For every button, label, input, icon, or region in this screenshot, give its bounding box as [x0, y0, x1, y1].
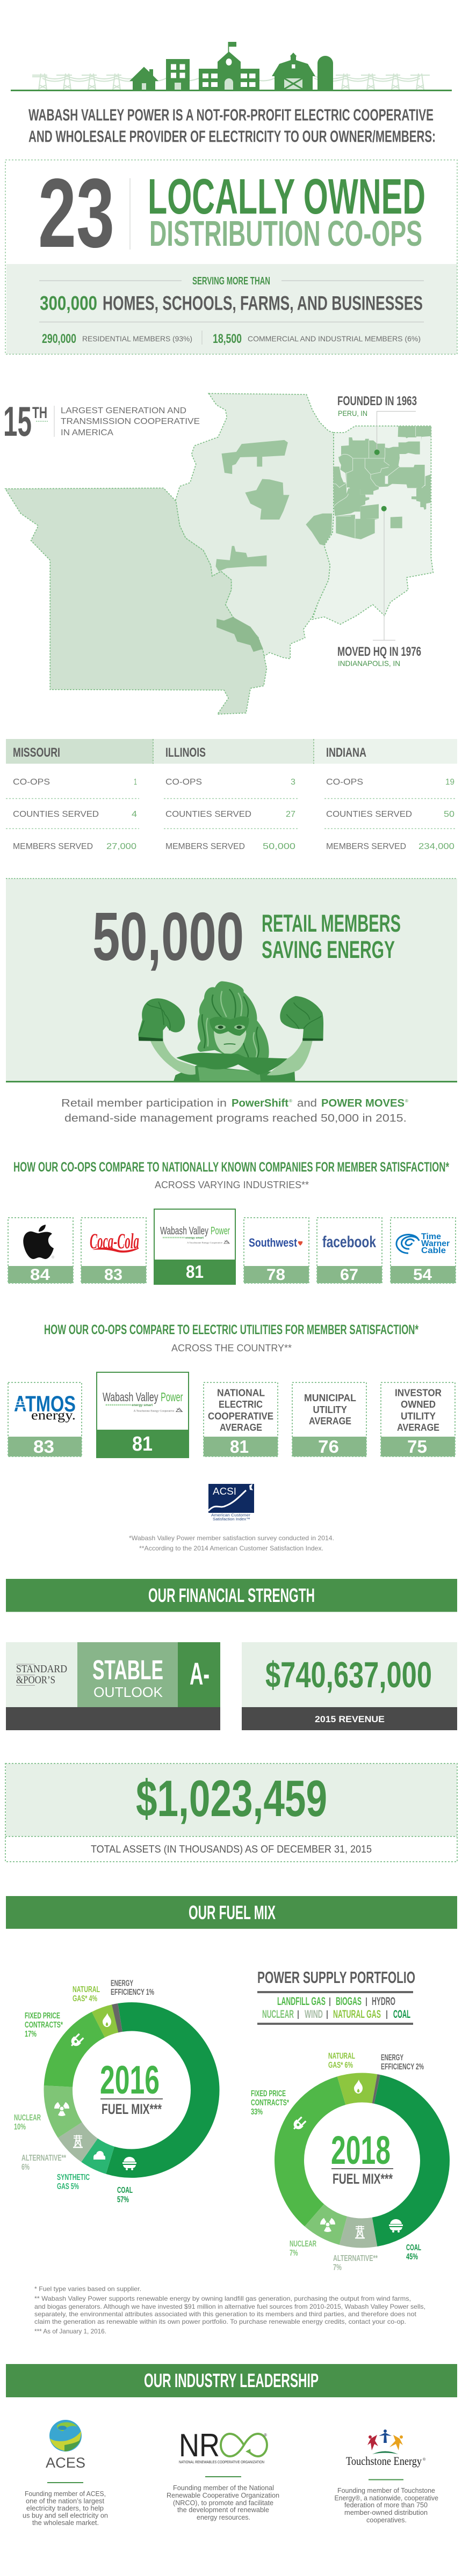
map: Missouri, Illinois, Indiana service territories — [3, 393, 433, 714]
center label 2018: 2018 — [331, 2128, 391, 2172]
column: Illinois: 27 — [286, 810, 295, 819]
logo: ACES — [46, 2420, 85, 2471]
footnotes: fuel mix: *** As of January 1, 2016. — [34, 2328, 106, 2335]
section header: fuel mix: OUR FUEL MIX — [189, 1901, 276, 1923]
column: Missouri: MEMBERS SERVED — [13, 842, 93, 851]
text: retail member participation: Retail member participation in — [61, 1097, 227, 1109]
text: Touchstone description: cooperatives. — [366, 2516, 407, 2524]
card: Wabash Valley Power 81: 81 — [132, 1433, 153, 1455]
card: Atmos Energy 83: 83 — [33, 1437, 54, 1457]
column: Illinois: 50,000 — [263, 842, 295, 851]
heading: electric utilities — [44, 1322, 418, 1353]
serving more than: SERVING MORE THAN — [192, 275, 270, 287]
icon: flame — [103, 2013, 111, 2027]
logo: NRCO — [179, 2427, 267, 2464]
text: ACES description: us buy and sell electricity on — [23, 2512, 108, 2519]
logo: NRCO: ® — [264, 2433, 267, 2438]
intro heading — [28, 105, 436, 146]
stat: 15th largest: IN AMERICA — [61, 428, 113, 437]
labels 2016: ALTERNATIVE** — [21, 2154, 67, 2163]
labels 2016: CONTRACTS* — [25, 2021, 63, 2030]
photo: child superhero with boxing gloves — [138, 981, 323, 1081]
card: Apple 84 — [8, 1218, 73, 1284]
icon: coal cart — [122, 2157, 136, 2170]
card: Facebook 67: 67 — [340, 1266, 358, 1284]
labels 2018: NATURAL — [328, 2052, 355, 2061]
leadership: Touchstone Energy — [334, 2429, 438, 2524]
labels 2016: ENERGY — [111, 1979, 133, 1988]
logo: ACES: ACES — [46, 2455, 85, 2471]
section header: industry leadership: OUR INDUSTRY LEADERSHIP — [144, 2369, 319, 2391]
column: Missouri: 4 — [132, 810, 137, 819]
leadership: NRCO — [167, 2427, 279, 2521]
stat: 15th largest: 15 — [3, 398, 32, 445]
card: municipal utility average 76: 76 — [318, 1437, 339, 1457]
text: Touchstone description: Energy®, a nationwide, cooperative — [334, 2494, 438, 2502]
power supply portfolio: LANDFILL GAS — [277, 1995, 326, 2008]
card: Time Warner Cable 54: Time — [421, 1232, 441, 1241]
logo: ACSI: American Customer — [211, 1512, 251, 1518]
number 50,000: 50,000 — [92, 898, 244, 975]
power supply portfolio: COAL — [393, 2008, 410, 2021]
serving more than — [39, 275, 424, 322]
icon: pylon — [355, 2226, 365, 2238]
text: Touchstone description: Founding member of Touchstone — [337, 2487, 435, 2494]
card: Time Warner Cable 54: Cable — [421, 1246, 446, 1255]
card: Atmos Energy 83: ATMOS — [14, 1391, 76, 1416]
illustration: town skyline with power lines — [11, 42, 452, 91]
labels 2018: 33% — [251, 2107, 263, 2117]
card: investor owned utility average 75: INVESTOR — [395, 1388, 442, 1399]
footnotes: fuel mix: separately, the environmental attributes associated with this generation to its members and third parties, and therefore does not — [34, 2310, 417, 2318]
icon: cloud — [93, 2151, 105, 2160]
callout: moved HQ in 1976: INDIANAPOLIS, IN — [338, 659, 400, 668]
heading: electric utilities: ACROSS THE COUNTRY** — [171, 1343, 292, 1353]
column: Missouri: COUNTIES SERVED — [13, 810, 99, 819]
card: Facebook 67 — [317, 1218, 382, 1284]
labels 2016: NATURAL — [73, 1985, 100, 1994]
panel: 2015 revenue: 2015 REVENUE — [315, 1714, 385, 1724]
logo: Standard & Poor's — [16, 1663, 67, 1686]
power supply portfolio: NUCLEAR — [262, 2008, 294, 2021]
stat: 15th largest — [3, 398, 200, 445]
labels 2018: ENERGY — [381, 2053, 403, 2062]
office building — [166, 59, 190, 90]
footnotes: fuel mix: and biogas generators. Although we have invested $91 million in alternative fuel sources from 2010-2015, Wabash Valley Power sells, — [34, 2303, 425, 2310]
Illinois — [175, 393, 334, 659]
column: Indiana: MEMBERS SERVED — [326, 842, 406, 851]
card: Wabash Valley Power 81 — [154, 1209, 236, 1285]
labels 2018: ALTERNATIVE** — [333, 2254, 378, 2263]
card: Time Warner Cable 54: Warner — [421, 1239, 450, 1248]
panel: 23 locally owned co-ops — [5, 158, 457, 354]
service areas: north Indiana — [333, 426, 431, 519]
column: Indiana: INDIANA — [326, 745, 366, 760]
section header: financial strength: OUR FINANCIAL STRENGTH — [148, 1584, 315, 1606]
column: Indiana: COUNTIES SERVED — [326, 810, 412, 819]
card: Wabash Valley Power 81 — [96, 1372, 189, 1458]
labels 2016: NUCLEAR — [14, 2113, 41, 2123]
card: investor owned utility average 75: 75 — [407, 1437, 427, 1457]
card: municipal utility average 76: UTILITY — [313, 1404, 347, 1415]
stable outlook: STABLE — [92, 1655, 163, 1685]
stable outlook: OUTLOOK — [93, 1684, 163, 1700]
column: Indiana: 234,000 — [418, 842, 454, 851]
stat: 15th largest: LARGEST GENERATION AND — [61, 406, 186, 415]
text: NRCO description: Renewable Cooperative Organization — [167, 2492, 279, 2499]
card: investor owned utility average 75: UTILITY — [401, 1411, 436, 1422]
card: municipal utility average 76 — [292, 1382, 366, 1457]
card: Coca-Cola 83 — [81, 1218, 146, 1284]
column: Illinois: COUNTIES SERVED — [165, 810, 251, 819]
300,000 homes line: 300,000 — [40, 292, 97, 314]
card: national electric cooperative average 81: 81 — [230, 1437, 249, 1457]
column: Illinois — [153, 739, 314, 851]
logo: Touchstone Energy — [346, 2429, 426, 2468]
text: ACES description: Founding member of ACES, — [25, 2490, 106, 2498]
text: NRCO description — [167, 2484, 279, 2521]
text: NRCO description: (NRCO), to promote and facilitate — [173, 2499, 273, 2507]
section header: fuel mix — [6, 1896, 457, 1929]
text: retail member participation: ® — [405, 1099, 408, 1103]
text: retail member participation — [61, 1097, 408, 1124]
silo — [317, 56, 333, 90]
labels 2016: 57% — [117, 2195, 129, 2205]
card: Coca-Cola 83: 83 — [104, 1266, 122, 1284]
center label 2018: FUEL MIX*** — [333, 2171, 393, 2187]
footnotes: fuel mix: ** Wabash Valley Power supports renewable energy by owning landfill gas generation, purchasing the output from wind farms, — [34, 2295, 411, 2302]
Missouri — [5, 488, 266, 714]
panel: total assets: $1,023,459 — [136, 1770, 327, 1827]
panel: 2015 revenue — [242, 1642, 457, 1730]
text: retail member participation: PowerShift — [232, 1097, 288, 1109]
residential members — [42, 332, 192, 346]
column: Indiana: 50 — [444, 810, 454, 819]
card: Southwest 78: Southwest — [249, 1236, 298, 1249]
card: investor owned utility average 75: OWNED — [401, 1399, 436, 1410]
card: Atmos Energy 83 — [8, 1382, 82, 1457]
callout: moved HQ in 1976 — [337, 506, 421, 668]
icon: flame — [354, 2080, 363, 2094]
labels 2018: CONTRACTS* — [251, 2098, 290, 2107]
card: Coca-Cola 83: Coca-Cola — [90, 1229, 139, 1253]
card: national electric cooperative average 81: NATIONAL — [217, 1388, 265, 1399]
table: state statistics — [6, 739, 457, 851]
footnotes: satisfaction sources: **According to the 2014 American Customer Satisfaction Index. — [139, 1545, 323, 1552]
icon: radiation — [53, 2102, 70, 2116]
stat: 15th largest: TRANSMISSION COOPERATIVE — [61, 417, 200, 426]
callout: founded in 1963: PERU, IN — [338, 409, 367, 418]
service areas: Illinois and south Indiana — [216, 440, 402, 572]
labels 2016: GAS 5% — [57, 2182, 79, 2191]
text: ACES description — [23, 2490, 108, 2527]
panel: 50,000 retail members — [6, 879, 457, 1082]
logo: Touchstone Energy: ® — [423, 2457, 426, 2462]
column: Illinois: ILLINOIS — [165, 745, 206, 760]
labels 2018: 7% — [333, 2263, 342, 2272]
power supply portfolio: HYDRO — [372, 1995, 395, 2008]
logo: NRCO: NR — [179, 2427, 220, 2463]
stat: 15th largest: TH — [32, 404, 47, 422]
center label 2016: FUEL MIX*** — [102, 2101, 162, 2117]
card: national electric cooperative average 81: ELECTRIC — [219, 1399, 263, 1410]
residential members: RESIDENTIAL MEMBERS (93%) — [82, 334, 192, 343]
card: Wabash Valley Power 81: 81 — [186, 1262, 204, 1282]
residential members: 290,000 — [42, 332, 76, 346]
card: Time Warner Cable 54: 54 — [413, 1266, 432, 1284]
commercial members: 18,500 — [213, 332, 242, 346]
retail members saving energy — [262, 910, 401, 963]
Indiana — [312, 426, 433, 624]
icon: radiation — [319, 2218, 336, 2232]
center label 2016 — [100, 2058, 163, 2117]
card: national electric cooperative average 81 — [204, 1382, 278, 1457]
retail members saving energy: SAVING ENERGY — [262, 936, 395, 963]
footnotes: fuel mix: * Fuel type varies based on supplier. — [34, 2285, 141, 2293]
labels 2018: NUCLEAR — [290, 2240, 316, 2249]
logo: ACSI: Satisfaction Index™ — [213, 1517, 250, 1521]
power supply portfolio — [257, 1968, 415, 2024]
barn — [272, 53, 315, 90]
donut chart: 2016 fuel mix — [14, 1979, 234, 2205]
footnotes: satisfaction sources — [129, 1534, 334, 1552]
text: Touchstone description: federation of more than 750 — [344, 2501, 428, 2509]
column: Indiana — [314, 739, 457, 851]
card: municipal utility average 76: AVERAGE — [309, 1416, 351, 1426]
column: Missouri: 27,000 — [106, 842, 136, 851]
icon: plug — [291, 2116, 307, 2132]
icon: plug — [68, 2032, 85, 2049]
labels 2016: COAL — [117, 2186, 133, 2195]
school with flag — [199, 42, 259, 90]
section header: industry leadership — [6, 2364, 457, 2397]
rating A-: A- — [190, 1657, 210, 1692]
power supply portfolio: WIND — [305, 2008, 323, 2021]
labels 2016: EFFICIENCY 1% — [111, 1988, 154, 1997]
text: Touchstone description — [334, 2487, 438, 2524]
labels 2016: SYNTHETIC — [57, 2173, 90, 2182]
card: Time Warner Cable 54 — [391, 1218, 456, 1284]
column: Illinois: CO-OPS — [165, 778, 202, 787]
card: Apple 84: 84 — [30, 1266, 50, 1284]
heading: nationally known companies — [13, 1160, 449, 1190]
commercial members — [213, 332, 421, 346]
column: Missouri: 1 — [134, 778, 137, 787]
column: Missouri: CO-OPS — [13, 778, 50, 787]
labels 2018: 45% — [406, 2252, 418, 2262]
ground line — [11, 90, 452, 91]
card: national electric cooperative average 81: AVERAGE — [220, 1422, 262, 1433]
text: retail member participation: demand-side management programs reached 50,000 in 2015. — [64, 1113, 407, 1124]
logo: ACSI — [208, 1484, 254, 1521]
logo: ACSI: ACSI — [213, 1486, 236, 1497]
footnotes: fuel mix: claim the generation as renewable within its own power portfolio. To purchase renewable energy credits, contact your co-op. — [34, 2318, 406, 2325]
callout: moved HQ in 1976: MOVED HQ IN 1976 — [337, 645, 421, 659]
labels 2016: 6% — [21, 2163, 30, 2172]
column: Missouri — [6, 739, 153, 851]
stable outlook — [92, 1655, 163, 1700]
labels 2016: FIXED PRICE — [25, 2011, 60, 2021]
text: retail member participation: and — [297, 1097, 317, 1109]
card: Southwest 78 — [244, 1218, 309, 1284]
panel: total assets — [5, 1763, 457, 1862]
icon: pylon — [73, 2135, 83, 2148]
callout: founded in 1963: FOUNDED IN 1963 — [337, 394, 417, 408]
center label 2016: 2016 — [100, 2058, 160, 2102]
column: Illinois: MEMBERS SERVED — [165, 842, 245, 851]
section header: financial strength — [6, 1579, 457, 1612]
footnotes: satisfaction sources: *Wabash Valley Power member satisfaction survey conducted in 2014. — [129, 1534, 334, 1542]
center label 2018 — [331, 2128, 393, 2187]
text: ACES description: the wholesale market. — [32, 2519, 99, 2527]
card: investor owned utility average 75: AVERAGE — [397, 1422, 439, 1433]
labels 2018: GAS* 6% — [328, 2061, 353, 2070]
card: Facebook 67: facebook — [322, 1233, 376, 1251]
logo: Touchstone Energy: Touchstone Energy — [346, 2454, 422, 2468]
labels 2016: 17% — [25, 2030, 37, 2039]
labels 2016: 10% — [14, 2123, 26, 2132]
text: ACES description: one of the nation’s largest — [26, 2498, 105, 2505]
text: NRCO description: the development of renewable — [177, 2506, 269, 2514]
text: ACES description: electricity traders, to help — [26, 2505, 104, 2512]
labels 2016: GAS* 4% — [73, 1994, 97, 2003]
callout: founded in 1963 — [337, 394, 417, 455]
big number 23: 23 — [38, 158, 114, 268]
column: Illinois: 3 — [291, 778, 295, 787]
card: Atmos Energy 83: energy. — [31, 1408, 76, 1423]
labels 2018: FIXED PRICE — [251, 2089, 286, 2098]
heading: nationally known companies: ACROSS VARYING INDUSTRIES** — [155, 1180, 309, 1190]
text: retail member participation: ® — [289, 1099, 292, 1103]
power supply portfolio: NATURAL GAS — [333, 2008, 381, 2021]
column: Missouri: MISSOURI — [13, 745, 60, 760]
icon: coal cart — [389, 2219, 403, 2233]
commercial members: COMMERCIAL AND INDUSTRIAL MEMBERS (6%) — [248, 334, 421, 343]
card: national electric cooperative average 81: COOPERATIVE — [208, 1411, 273, 1422]
footnotes: fuel mix — [34, 2285, 425, 2335]
text: NRCO description: Founding member of the National — [173, 2484, 274, 2492]
power supply portfolio: BIOGAS — [336, 1995, 362, 2008]
logo: Standard & Poor's: STANDARD — [16, 1663, 67, 1675]
panel: total assets: TOTAL ASSETS (IN THOUSANDS) AS OF DECEMBER 31, 2015 — [91, 1844, 372, 1855]
text: retail member participation: POWER MOVES — [321, 1097, 405, 1109]
logo: Standard & Poor's: &POOR’S — [16, 1674, 55, 1686]
labels 2018: 7% — [290, 2249, 298, 2258]
labels 2016 — [14, 1979, 154, 2205]
power pylons and cables — [32, 74, 430, 90]
card: Southwest 78: 78 — [266, 1266, 285, 1284]
donut chart: 2018 fuel mix — [251, 2052, 462, 2272]
labels 2018 — [251, 2052, 424, 2272]
labels 2018: EFFICIENCY 2% — [381, 2062, 424, 2072]
card: investor owned utility average 75 — [381, 1382, 455, 1457]
card: Apple 84: ® — [52, 1255, 55, 1260]
column: Indiana: 19 — [445, 778, 454, 787]
labels 2018: COAL — [406, 2243, 421, 2252]
leadership: ACES — [23, 2420, 108, 2527]
logo: NRCO: NATIONAL RENEWABLES COOPERATIVE ORGANIZATION — [179, 2461, 264, 2464]
text: Touchstone description: member-owned distribution — [344, 2509, 428, 2516]
card: municipal utility average 76: MUNICIPAL — [304, 1393, 356, 1403]
text: NRCO description: energy resources. — [197, 2514, 250, 2521]
panel: Standard & Poor's rating — [6, 1642, 220, 1730]
column: Indiana: CO-OPS — [326, 778, 363, 787]
house — [129, 67, 158, 90]
